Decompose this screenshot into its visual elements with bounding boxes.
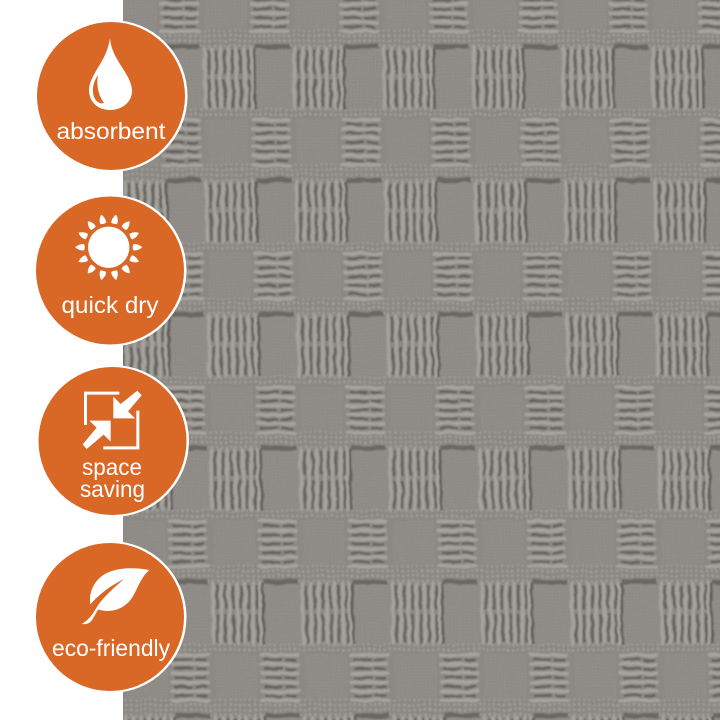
label: space saving: space: [82, 454, 142, 480]
badge: space saving: [37, 365, 189, 517]
label: space saving: [80, 454, 145, 502]
label: quick dry: quick dry: [62, 292, 159, 318]
badge: quick dry: [34, 194, 186, 346]
label: space saving: saving: [80, 476, 145, 502]
icon: sun: [75, 214, 142, 281]
label: eco-friendly: eco-friendly: [52, 635, 170, 661]
badge: absorbent: [36, 20, 188, 172]
icon: water drop: [89, 38, 132, 110]
icon: compress arrows: [83, 391, 142, 449]
label: absorbent: absorbent: [56, 118, 166, 144]
icon: leaf: [82, 568, 149, 624]
badge: eco-friendly: [34, 541, 186, 693]
